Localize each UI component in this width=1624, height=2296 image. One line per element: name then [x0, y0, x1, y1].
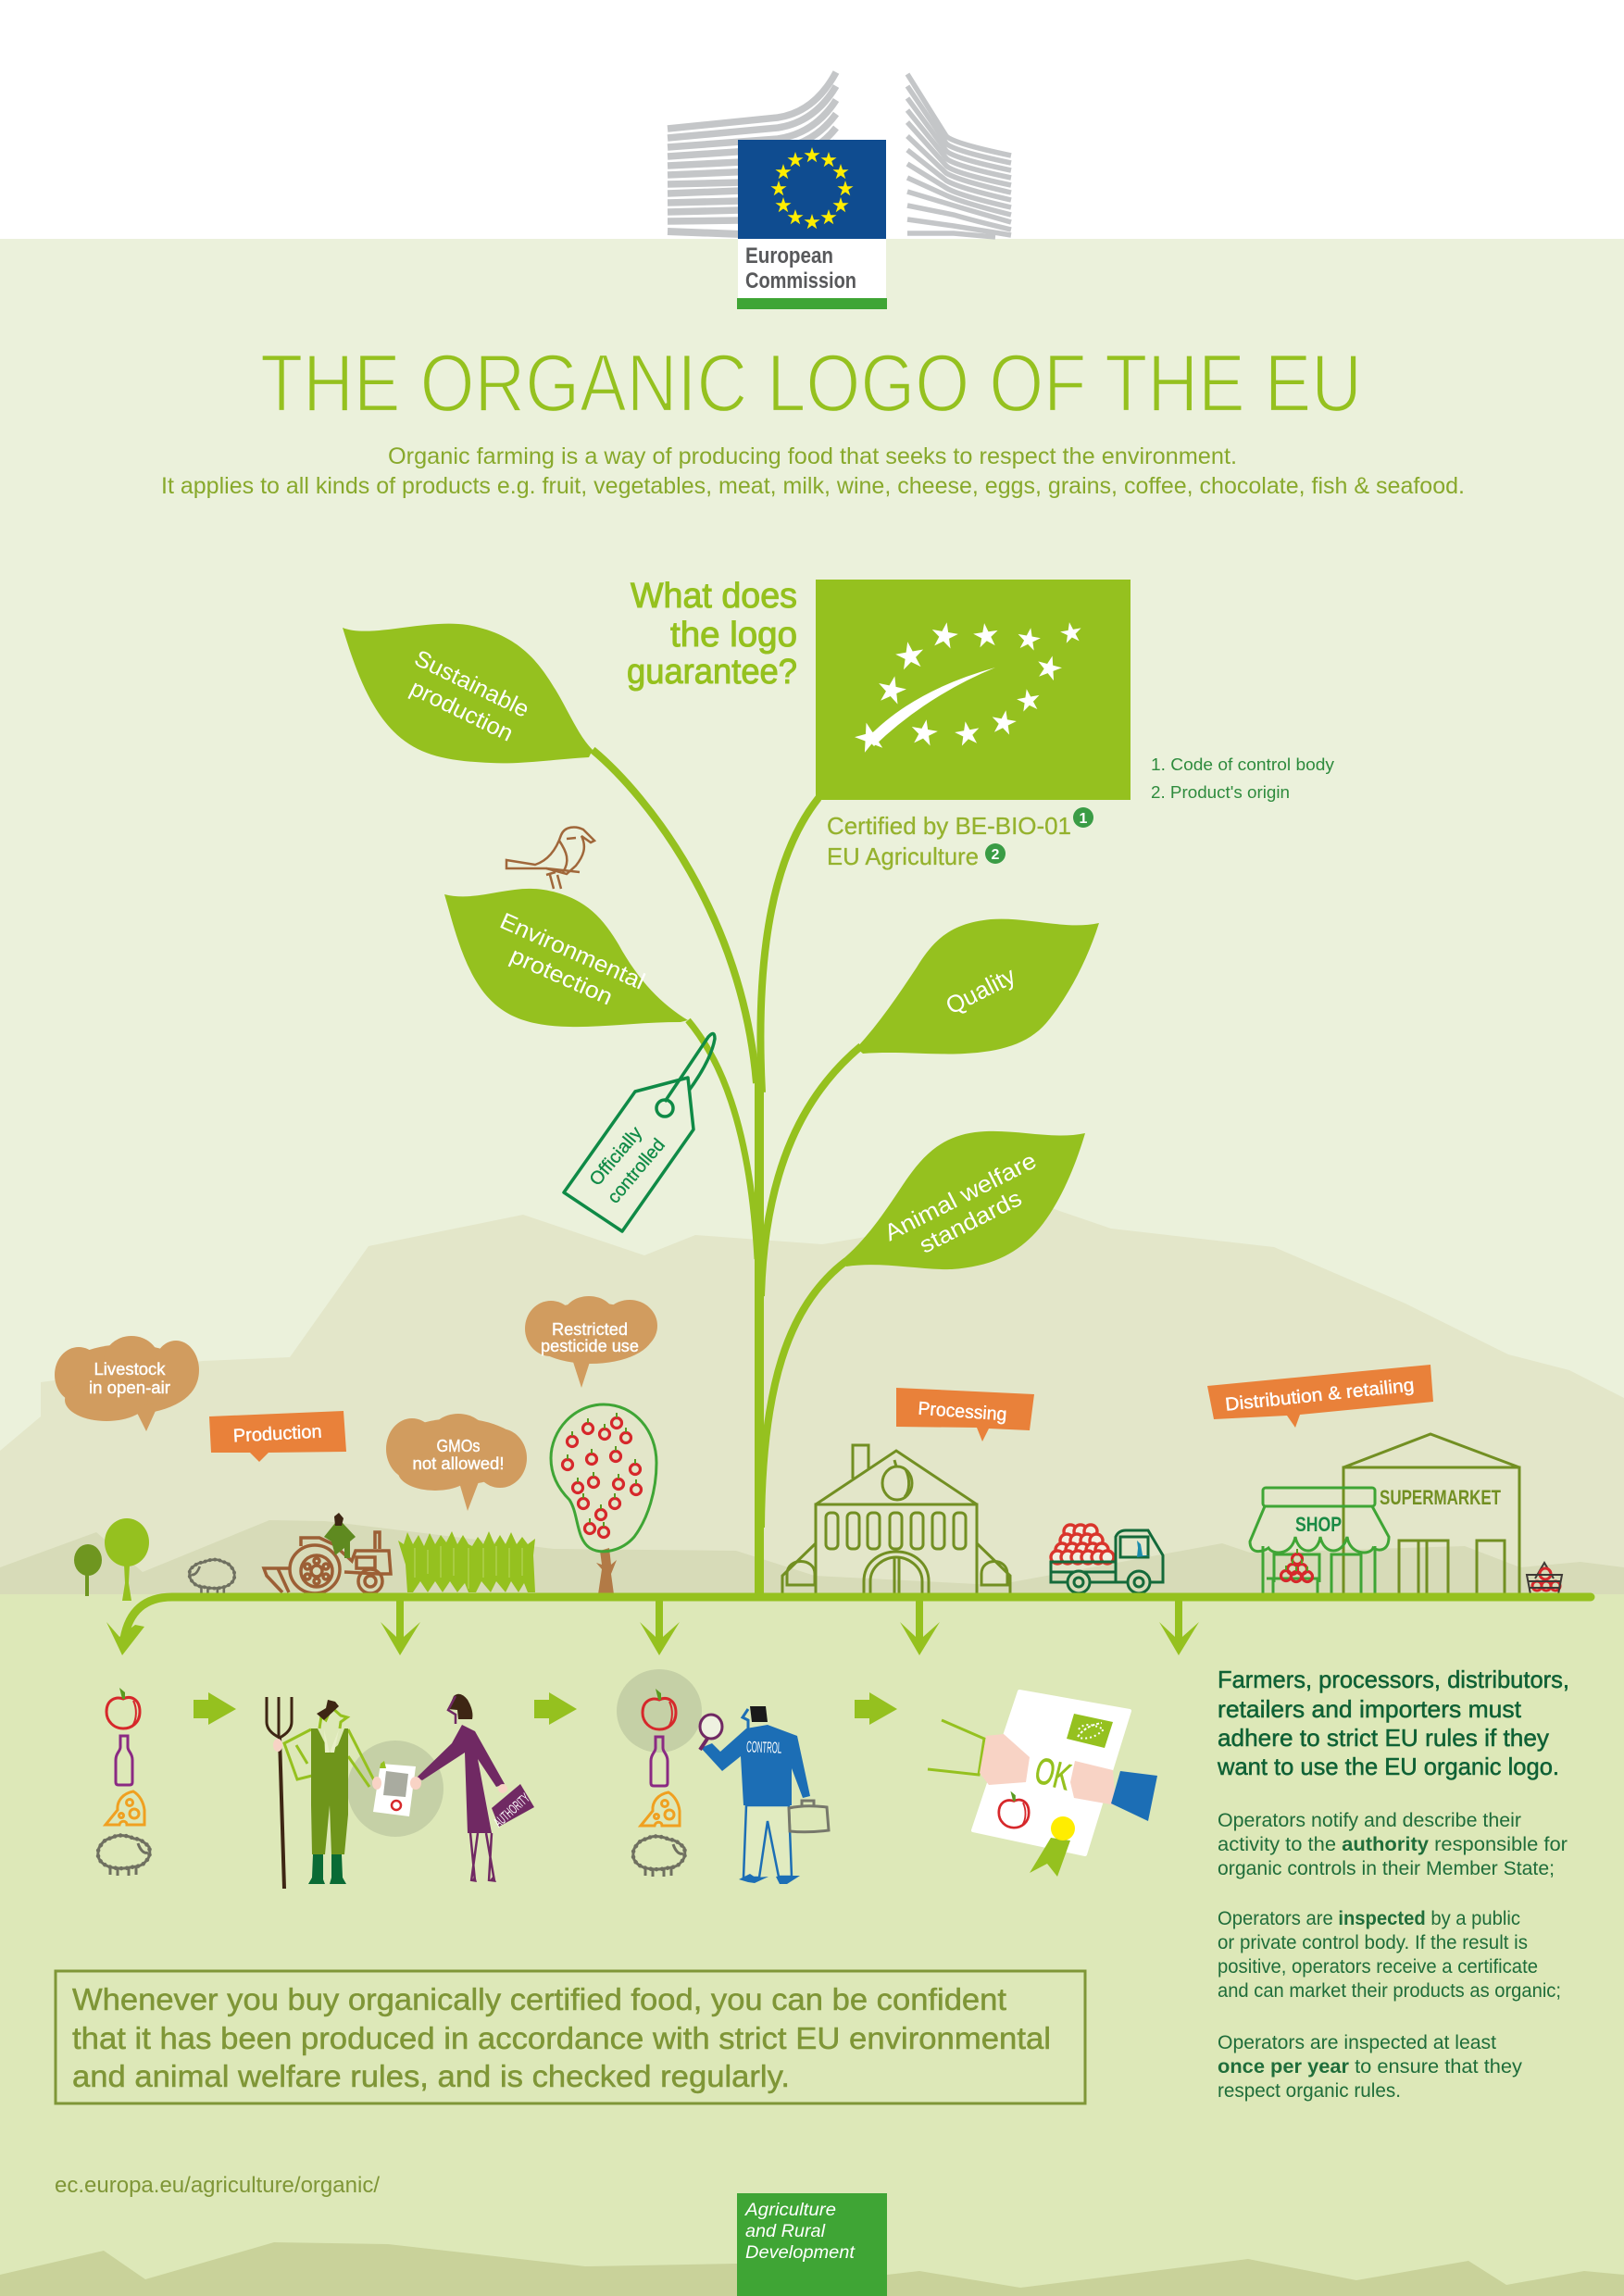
heading: what does the logo guarantee: What does	[631, 577, 797, 616]
shop	[1250, 1488, 1389, 1594]
paragraph: once per year: respect organic rules.	[1218, 2080, 1401, 2102]
leaf: animal welfare standards: Animal welfare	[881, 1148, 1041, 1246]
certificate	[928, 1691, 1157, 1877]
shop apples	[1281, 1549, 1313, 1581]
ground line with curve	[124, 1597, 1591, 1639]
delivery truck	[1051, 1525, 1163, 1593]
paragraph: inspected: Operators are inspected by a public	[1218, 1908, 1520, 1929]
intro text: It applies to all kinds of products e.g. fruit, vegetables, meat, milk, wine, cheese, eggs, grains, coffee, chocolate, fish & seafood.	[161, 473, 1465, 499]
paragraph: once per year	[1218, 2032, 1523, 2102]
agriculture and rural development box	[737, 2193, 887, 2296]
intro text	[161, 443, 1465, 499]
OK stamp: OK	[1031, 1750, 1075, 1798]
apple tree	[551, 1404, 656, 1594]
truck driver	[1137, 1541, 1151, 1557]
label: distribution and retailing: Distribution & retailing	[1224, 1375, 1415, 1416]
shop: SHOP	[1295, 1513, 1342, 1536]
logo wordmark: European	[745, 243, 833, 268]
processing factory	[782, 1445, 1010, 1594]
certification text	[827, 807, 1093, 870]
document	[373, 1761, 416, 1816]
small organic logo	[1067, 1714, 1113, 1748]
cloud: restricted pesticide use: Restricted	[552, 1320, 628, 1339]
arrow 2	[381, 1601, 420, 1655]
farmer arms	[284, 1729, 374, 1787]
callout box	[56, 1971, 1085, 2103]
inspector case	[789, 1801, 829, 1832]
paragraph: once per year: once per year to ensure that they	[1218, 2056, 1523, 2078]
logo footnotes	[1151, 755, 1334, 802]
blue sleeve	[1111, 1771, 1157, 1821]
grey circle behind document	[347, 1741, 443, 1837]
supermarket: SUPERMARKET	[1380, 1486, 1501, 1509]
label: processing	[896, 1388, 1034, 1441]
arrow 3	[640, 1601, 680, 1655]
ground	[0, 1594, 1624, 2296]
label: production: Production	[232, 1422, 322, 1447]
leaf: sustainable production: Sustainable	[410, 645, 533, 723]
certification text: Certified by BE-BIO-01	[827, 812, 1071, 840]
leaf: animal welfare standards: standards	[916, 1185, 1026, 1259]
trees	[74, 1518, 149, 1601]
EU organic logo	[816, 580, 1131, 800]
right hand	[1070, 1761, 1116, 1805]
right text: rules heading: retailers and importers must	[1218, 1695, 1522, 1723]
tag: officially controlled: Officially	[586, 1123, 646, 1190]
EU stars	[770, 147, 854, 229]
badge 1: 1	[1080, 811, 1088, 827]
certificate apple	[999, 1791, 1029, 1828]
right text: rules heading: adhere to strict EU rules if they	[1218, 1724, 1549, 1752]
building left	[668, 72, 836, 234]
paragraph: once per year: Operators are inspected at least	[1218, 2032, 1496, 2053]
leaf: environmental protection	[444, 889, 688, 1027]
shopping basket	[1527, 1563, 1562, 1594]
page background	[0, 0, 1624, 1600]
cloud: livestock in open-air	[55, 1336, 199, 1431]
farmer	[267, 1697, 374, 1889]
agriculture and rural development box: and Rural	[745, 2222, 826, 2241]
paragraph: inspected: positive, operators receive a certificate	[1218, 1956, 1538, 1978]
bottom mountains	[0, 2242, 1624, 2296]
agriculture and rural development box: Agriculture	[744, 2201, 836, 2220]
leaf: animal welfare standards	[841, 1131, 1085, 1269]
paragraph: notify: activity to the authority responsible for	[1218, 1834, 1568, 1855]
leaf: sustainable production	[343, 624, 593, 763]
ribbon	[1030, 1838, 1070, 1877]
green arm outline	[928, 1720, 984, 1775]
cloud: GMOs not allowed: GMOs	[437, 1437, 480, 1455]
magnifier	[700, 1715, 722, 1739]
right text: rules heading: want to use the EU organic logo.	[1217, 1753, 1559, 1780]
leaf: environmental protection: Environmental	[496, 908, 649, 995]
label: production	[209, 1411, 346, 1462]
flow arrow 2	[534, 1692, 577, 1725]
logo footnotes: 2. Product's origin	[1151, 783, 1290, 802]
authority woman: AUTHORITY	[491, 1791, 533, 1830]
leaf: quality	[856, 919, 1099, 1054]
paragraph: notify: Operators notify and describe their	[1218, 1810, 1521, 1831]
European Commission logo	[668, 72, 1011, 309]
label: distribution and retailing	[1207, 1365, 1433, 1428]
cloud: livestock in open-air: Livestock	[94, 1360, 167, 1379]
products column 1	[98, 1688, 150, 1876]
callout box: that it has been produced in accordance with strict EU environmental	[72, 2021, 1051, 2055]
title: THE ORGANIC LOGO OF THE EU	[260, 337, 1362, 429]
paragraph: inspected	[1218, 1908, 1561, 2002]
tractor driver	[324, 1523, 356, 1558]
plant stems	[593, 750, 861, 1597]
inspector: CONTROL	[746, 1738, 782, 1757]
badge 2	[985, 843, 1006, 864]
flow arrow 1	[194, 1692, 236, 1725]
arrow 1	[106, 1622, 144, 1655]
badge 2: 2	[992, 847, 1000, 863]
flag	[738, 140, 886, 239]
right text: rules heading: Farmers, processors, distributors,	[1218, 1666, 1569, 1693]
icon: small sheep	[190, 1560, 234, 1594]
background mountains far	[0, 1206, 1624, 1594]
paragraph: inspected: and can market their products as organic;	[1218, 1980, 1561, 2002]
heading: what does the logo guarantee: the logo	[670, 616, 797, 655]
heading: what does the logo guarantee: guarantee?	[627, 653, 797, 692]
truck apples	[1051, 1525, 1114, 1564]
agriculture and rural development box: Development	[745, 2243, 856, 2263]
paragraph: inspected: or private control body. If the result is	[1218, 1932, 1528, 1953]
badge 1	[1073, 807, 1093, 828]
flow arrow 3	[855, 1692, 897, 1725]
icon: bird	[506, 828, 594, 889]
leaf: sustainable production: production	[406, 675, 518, 747]
farmer head	[319, 1707, 347, 1728]
website url: ec.europa.eu/agriculture/organic/	[55, 2173, 380, 2198]
crops field	[398, 1531, 535, 1592]
logo footnotes: 1. Code of control body	[1151, 755, 1334, 774]
icon: tractor	[264, 1513, 391, 1593]
building right	[907, 74, 1011, 237]
European Commission logo: Commission	[745, 268, 856, 293]
left hand	[980, 1734, 1030, 1785]
paragraph: notify: organic controls in their Member State;	[1218, 1858, 1555, 1879]
heading: what does the logo guarantee	[627, 577, 797, 692]
authority briefcase	[492, 1784, 534, 1827]
tree apples	[563, 1413, 641, 1537]
cloud: GMOs not allowed: not allowed!	[413, 1454, 504, 1473]
tag: officially controlled	[564, 1033, 715, 1231]
arrow 5	[1159, 1601, 1199, 1655]
cloud: restricted pesticide use	[525, 1296, 657, 1388]
certification text: EU Agriculture	[827, 842, 979, 870]
grey circle behind apple	[617, 1669, 702, 1753]
cloud: livestock in open-air: in open-air	[89, 1379, 170, 1397]
paragraph: notify	[1218, 1810, 1568, 1879]
right text: rules heading	[1217, 1666, 1569, 1780]
cloud: restricted pesticide use: pesticide use	[541, 1337, 639, 1355]
tag: officially controlled: controlled	[604, 1135, 669, 1207]
medal	[1051, 1816, 1075, 1841]
leaf: quality: Quality	[941, 961, 1019, 1020]
logo stars	[852, 620, 1083, 754]
cloud: GMOs not allowed	[386, 1414, 527, 1511]
arrow 4	[900, 1601, 940, 1655]
label: processing: Processing	[918, 1399, 1007, 1425]
inspector	[700, 1706, 829, 1884]
logo swoosh	[867, 668, 995, 746]
background mountains near	[0, 1520, 1624, 1596]
callout box: and animal welfare rules, and is checked regularly.	[72, 2059, 790, 2093]
callout box: Whenever you buy organically certified food, you can be confident	[72, 1982, 1006, 2016]
products column 2	[633, 1689, 685, 1877]
leaf: environmental protection: protection	[506, 942, 617, 1010]
supermarket	[1343, 1434, 1519, 1594]
intro text: Organic farming is a way of producing food that seeks to respect the environment.	[388, 443, 1237, 469]
pitchfork	[267, 1697, 292, 1889]
authority woman	[372, 1694, 534, 1882]
